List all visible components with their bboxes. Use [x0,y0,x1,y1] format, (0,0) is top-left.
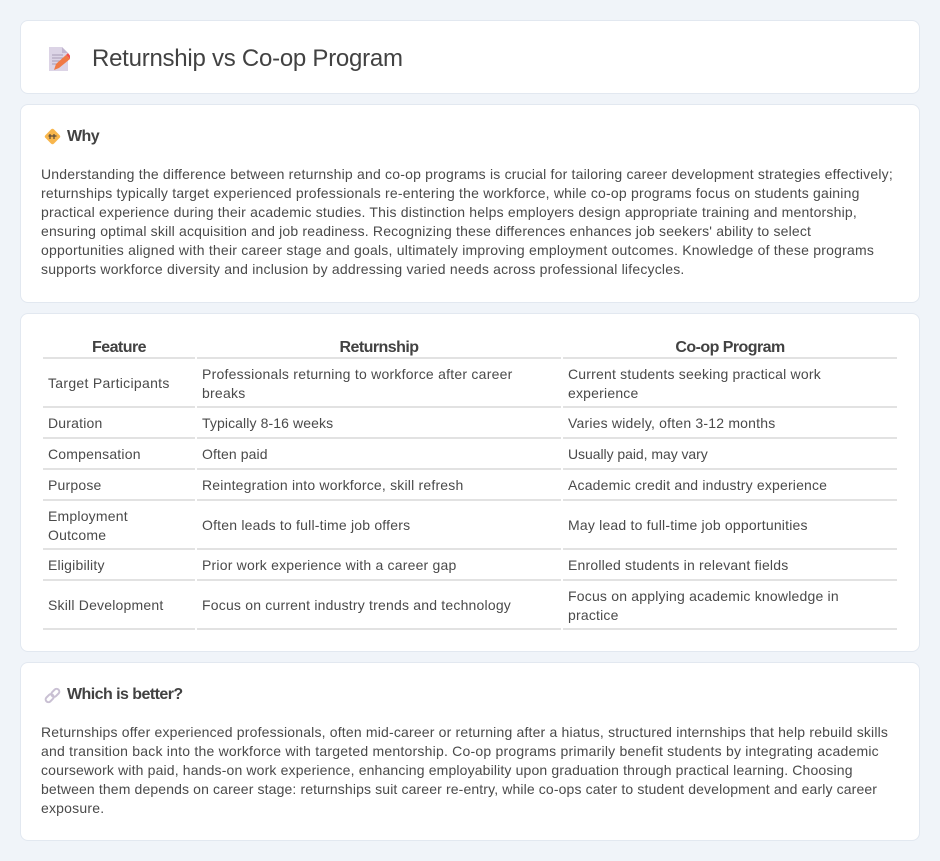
row: purpose: Academic credit and industry experience [568,477,827,493]
row: target participants: Professionals returning to workforce after career [202,366,513,382]
which is better paragraph: exposure. [41,800,104,816]
icon: memo with pencil [49,47,70,71]
row: compensation [48,446,708,462]
heading: why: Why [67,128,99,145]
row: duration: Typically 8-16 weeks [202,415,333,431]
which is better paragraph [41,724,888,816]
title heading: Returnship vs Co-op Program [92,45,403,72]
why paragraph: Understanding the difference between returnship and co-op programs is crucial for tailoring career development strategies effectively; [41,166,893,182]
table header: Returnship [340,339,418,356]
panel: title [20,20,920,94]
row: duration: Duration [48,415,103,431]
panel: comparison table [20,313,920,652]
row: skill development: practice [568,607,619,623]
why paragraph [41,166,893,277]
row: target participants: Current students seeking practical work [568,366,821,382]
row: employment outcome: Employment [48,508,128,524]
row: compensation: Compensation [48,446,141,462]
icon: children crossing sign [44,128,60,144]
which is better paragraph: Returnships offer experienced professionals, often mid-career or returning after a hiatus, structured internships that help rebuild skills [41,724,888,740]
row: eligibility [48,557,788,573]
row: eligibility: Prior work experience with a career gap [202,557,456,573]
row: employment outcome: Outcome [48,527,106,543]
which is better paragraph: coursework with paid, hands-on work experience, enhancing employability upon graduation through practical learning. Choosing [41,762,853,778]
row: target participants [48,366,821,401]
row: skill development: Focus on current industry trends and technology [202,597,511,613]
row: target participants: experience [568,385,638,401]
table header: Co-op Program [675,339,785,356]
row: target participants: Target Participants [48,375,170,391]
why paragraph: returnships typically target experienced professionals re-entering the workforce, while co-op programs focus on students gaining [41,185,860,201]
why paragraph: practical experience during their academic studies. This distinction helps employers design appropriate training and mentorship, [41,204,857,220]
which is better paragraph: between them depends on career stage: returnships suit career re-entry, while co-ops cater to student development and early career [41,781,877,797]
why paragraph: opportunities aligned with their career stage and goals, ultimately improving employment outcomes. Knowledge of these programs [41,242,874,258]
row: compensation: Often paid [202,446,268,462]
table header: Feature [92,339,146,356]
why paragraph: supports workforce diversity and inclusion by addressing varied needs across professional lifecycles. [41,261,685,277]
row: target participants: breaks [202,385,245,401]
row: duration [48,415,775,431]
which is better paragraph: and transition back into the workforce with targeted mentorship. Co-op programs primarily benefit students by integrating academic [41,743,879,759]
row: skill development: Skill Development [48,597,163,613]
row: employment outcome [48,508,808,543]
row: compensation: Usually paid, may vary [568,446,708,462]
why paragraph: ensuring optimal skill acquisition and job readiness. Recognizing these differences enhances job seekers' ability to select [41,223,811,239]
row: skill development: Focus on applying academic knowledge in [568,588,839,604]
row: eligibility: Enrolled students in relevant fields [568,557,788,573]
panel: which is better [20,662,920,841]
heading: which is better: Which is better? [67,686,183,703]
table header [92,339,785,356]
row: purpose: Reintegration into workforce, skill refresh [202,477,463,493]
panel: why [20,104,920,303]
row: employment outcome: Often leads to full-time job offers [202,517,410,533]
row: duration: Varies widely, often 3-12 months [568,415,775,431]
row: purpose: Purpose [48,477,102,493]
row: eligibility: Eligibility [48,557,105,573]
row: purpose [48,477,827,493]
row: employment outcome: May lead to full-time job opportunities [568,517,808,533]
row: skill development [48,588,839,623]
icon: link [44,688,60,704]
